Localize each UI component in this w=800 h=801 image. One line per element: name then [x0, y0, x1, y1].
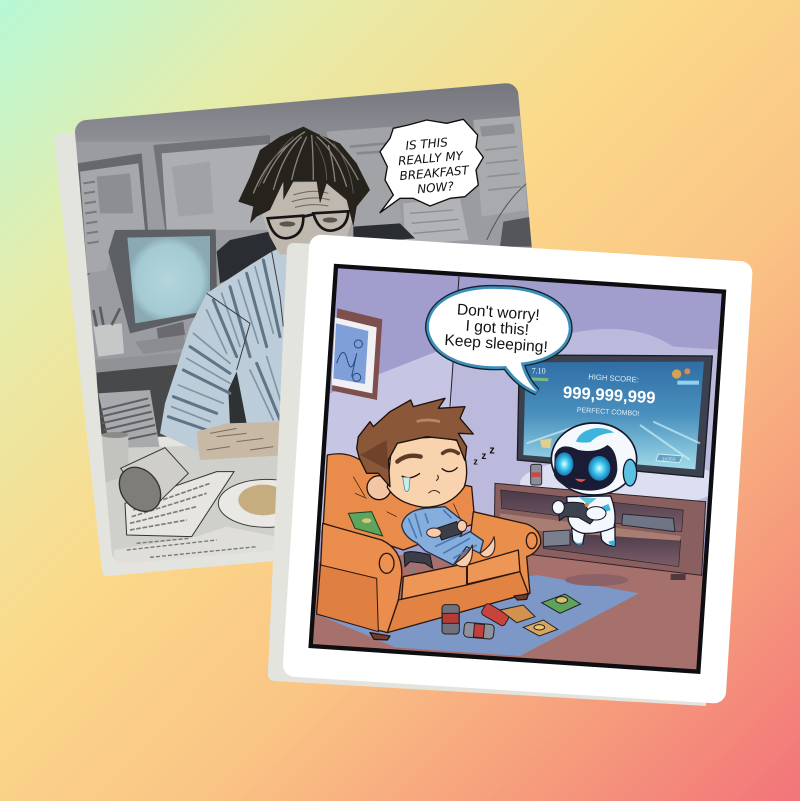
controller on sofa	[404, 552, 433, 571]
hair	[238, 127, 370, 227]
back comic image	[75, 83, 532, 558]
wall boards	[77, 116, 533, 277]
pajama body	[402, 507, 483, 565]
zzz: z	[489, 444, 495, 456]
card: front cartoon comic	[268, 234, 753, 706]
zzz: z	[481, 451, 486, 462]
card: back grayscale office comic	[50, 70, 550, 576]
glasses	[268, 211, 348, 238]
tear	[403, 477, 410, 492]
robot speech bubble	[429, 289, 569, 392]
tv stand	[494, 483, 706, 580]
head	[357, 398, 473, 507]
zzz	[474, 448, 494, 464]
hair	[357, 398, 473, 487]
game score tv: HIGH SCORE:	[588, 372, 639, 384]
papers on desk	[113, 472, 277, 567]
tipped over cup	[118, 447, 189, 512]
framed picture	[332, 308, 382, 400]
office chair	[217, 223, 415, 283]
orange sofa and boy	[317, 398, 541, 640]
hands holding controller	[427, 520, 467, 540]
game score tv: PERFECT COMBO!	[577, 407, 640, 418]
forearm	[196, 422, 280, 460]
keyboard and pen cup	[93, 307, 187, 357]
game score tv	[517, 355, 712, 477]
crt monitor	[108, 229, 217, 340]
snack bag on sofa	[348, 512, 383, 536]
standing cup	[102, 432, 128, 552]
speech bubble: jagged: NOW?	[417, 179, 455, 196]
plate with food	[218, 478, 277, 528]
game score tv: 999,999,999	[562, 383, 656, 407]
soda can on stand	[531, 464, 542, 485]
game score tv: 10350	[662, 457, 676, 463]
front card white paper	[282, 234, 753, 704]
back card paper layer	[54, 112, 330, 576]
floor and rug	[307, 547, 708, 677]
controller	[558, 502, 595, 524]
robot speech bubble: Keep sleeping!	[444, 332, 548, 356]
panel border	[311, 266, 724, 672]
game score tv: 7.10	[532, 366, 546, 375]
living room wall	[318, 268, 722, 573]
front card shadow layer	[268, 243, 725, 706]
mess of cans and chips	[442, 594, 581, 639]
robot body	[567, 496, 615, 533]
orange sofa	[317, 454, 541, 640]
brows eyes mouth	[397, 456, 421, 462]
speech bubble: jagged: IS THIS	[405, 135, 449, 153]
desk	[95, 352, 290, 570]
bare feet	[455, 537, 495, 567]
speech bubble: jagged: REALLY MY	[398, 148, 465, 168]
speech bubble: jagged	[380, 119, 483, 213]
sleeping boy	[357, 398, 495, 567]
robot speech bubble: I got this!	[465, 318, 529, 339]
office wall	[76, 142, 532, 437]
robot head	[551, 423, 637, 495]
helper robot	[551, 423, 637, 546]
zzz: z	[473, 457, 478, 467]
front comic panel	[307, 263, 730, 677]
face and neck	[262, 180, 355, 255]
game console	[543, 514, 675, 547]
robot feet	[572, 525, 615, 546]
speech bubble: jagged: BREAKFAST	[399, 163, 471, 183]
robot speech bubble: Don't worry!	[456, 301, 540, 324]
man in shirt	[160, 127, 370, 460]
